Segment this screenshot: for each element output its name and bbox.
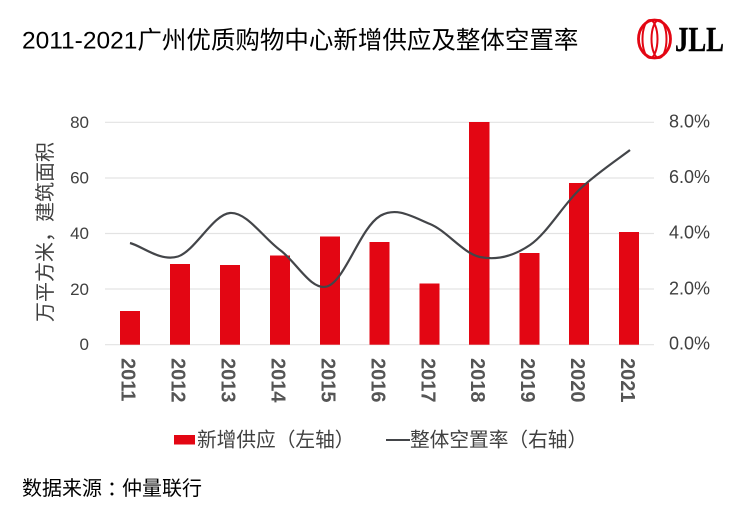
icon: JLL logo bbox=[638, 20, 724, 59]
legend bbox=[174, 430, 587, 452]
right axis labels: 0.0% bbox=[669, 334, 710, 354]
left axis title: 万平方米，建筑面积 bbox=[34, 142, 57, 322]
x axis year labels: 2018 bbox=[466, 358, 488, 402]
bars: new supply bbox=[120, 122, 639, 345]
x axis year labels: 2017 bbox=[416, 358, 438, 402]
x axis year labels: 2012 bbox=[166, 358, 188, 402]
x axis year labels: 2020 bbox=[566, 358, 588, 402]
x axis year labels: 2013 bbox=[216, 358, 238, 402]
left axis labels: 80 bbox=[70, 113, 89, 132]
title: 2011-2021广州优质购物中心新增供应及整体空置率 bbox=[22, 26, 578, 54]
x axis year labels: 2014 bbox=[266, 358, 288, 403]
chart: supply bars and vacancy line bbox=[34, 112, 710, 403]
legend: new supply: 新增供应（左轴） bbox=[197, 430, 354, 452]
legend: vacancy rate: 整体空置率（右轴） bbox=[410, 430, 587, 452]
left axis labels: 40 bbox=[70, 224, 89, 243]
right axis labels: 8.0% bbox=[669, 112, 710, 132]
line: overall vacancy rate bbox=[130, 150, 630, 287]
right axis labels bbox=[669, 112, 710, 354]
right axis labels: 6.0% bbox=[669, 167, 710, 187]
x axis year labels bbox=[116, 358, 638, 403]
x axis year labels: 2011 bbox=[116, 358, 138, 401]
source note: 数据来源：仲量联行 bbox=[22, 477, 202, 500]
right axis labels: 2.0% bbox=[669, 278, 710, 298]
left axis labels: 0 bbox=[80, 335, 89, 354]
x axis year labels: 2016 bbox=[366, 358, 388, 402]
x axis year labels: 2015 bbox=[316, 358, 338, 402]
x axis year labels: 2021 bbox=[616, 358, 638, 402]
x axis year labels: 2019 bbox=[516, 358, 538, 402]
icon: JLL logo: JLL bbox=[675, 20, 724, 59]
left axis labels: 60 bbox=[70, 168, 89, 188]
right axis labels: 4.0% bbox=[669, 222, 710, 242]
left axis labels bbox=[70, 113, 89, 354]
left axis labels: 20 bbox=[70, 280, 89, 299]
